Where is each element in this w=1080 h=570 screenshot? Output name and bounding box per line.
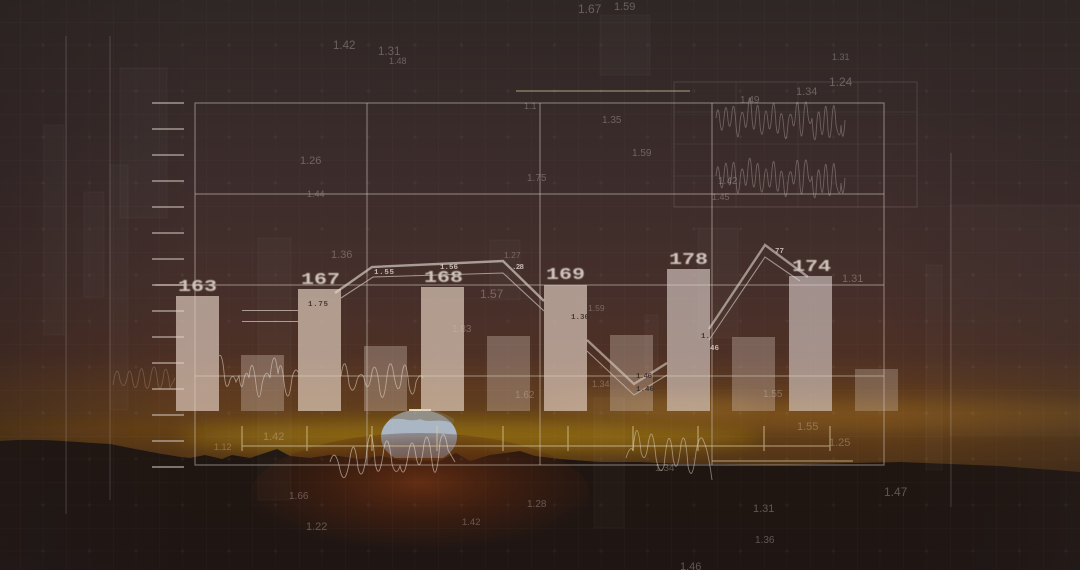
background numbers: 1.34 — [592, 379, 610, 389]
bar value labels: 163 — [178, 278, 217, 297]
bar value labels: 168 — [424, 269, 463, 288]
background numbers: 1.42 — [263, 431, 284, 443]
faint left waveform — [113, 367, 175, 388]
bar value labels: 178 — [669, 251, 708, 270]
chart frame — [155, 103, 884, 465]
bar value labels — [178, 251, 831, 297]
background numbers: 1.34 — [655, 463, 675, 474]
lower waveform — [330, 435, 455, 478]
background numbers: 1.27 — [504, 250, 521, 260]
bars — [176, 269, 898, 411]
background numbers: 1.42 — [718, 176, 738, 187]
background numbers: 1.47 — [884, 485, 908, 499]
series point labels: 1.46 — [636, 373, 652, 381]
series point labels: 1.46 — [636, 386, 654, 394]
line series — [335, 245, 808, 395]
series point labels: 77 — [775, 248, 784, 256]
series point labels: 1.55 — [374, 269, 394, 277]
ground glow — [250, 433, 590, 557]
background numbers: 1.42 — [333, 40, 355, 52]
background numbers: 1.83 — [452, 324, 472, 335]
bar value labels: 174 — [792, 258, 831, 277]
background numbers: 1.36 — [755, 535, 775, 546]
short legend lines — [242, 310, 298, 322]
background numbers: 1.59 — [632, 148, 652, 159]
series point labels: .28 — [512, 264, 524, 272]
upper waveforms — [716, 98, 845, 198]
background numbers: 1.25 — [829, 437, 850, 449]
horizon silhouette — [0, 440, 1080, 570]
background numbers: 1.44 — [307, 189, 325, 199]
center waveform — [113, 355, 423, 397]
series point labels: 1.56 — [440, 264, 458, 272]
background numbers: 1.31 — [832, 52, 850, 62]
background numbers — [214, 1, 908, 570]
series point labels: 46 — [710, 345, 720, 353]
series point labels: 1. — [701, 333, 710, 341]
background numbers: 1.1 — [524, 101, 537, 111]
background numbers: 1.48 — [389, 56, 407, 66]
y axis ticks — [152, 103, 184, 467]
background numbers: 1.22 — [306, 521, 327, 533]
background numbers: 1.57 — [480, 287, 504, 301]
background numbers: 1.55 — [763, 389, 783, 400]
thick trend line — [335, 261, 544, 301]
background numbers: 1.28 — [527, 499, 547, 510]
background numbers: 1.36 — [331, 249, 352, 261]
background numbers: 1.31 — [378, 46, 400, 58]
series point labels: 1.36 — [571, 314, 589, 322]
background numbers: 1.59 — [614, 1, 635, 13]
background numbers: 1.62 — [515, 390, 535, 401]
series point labels — [308, 248, 784, 394]
background numbers: 1.59 — [588, 303, 605, 313]
series point labels: 1.75 — [308, 301, 328, 309]
background numbers: 1.66 — [289, 491, 309, 502]
background numbers: 1.31 — [842, 273, 863, 285]
background numbers: 1.12 — [214, 442, 232, 452]
background numbers: 1.31 — [753, 503, 774, 515]
background numbers: 1.24 — [829, 75, 853, 89]
thin trend line — [341, 273, 544, 311]
sun — [381, 409, 457, 458]
upper right panel — [674, 82, 917, 207]
bar value labels: 167 — [301, 271, 340, 290]
background numbers: 1.75 — [527, 173, 547, 184]
right lower waveform — [626, 430, 712, 480]
background numbers: 1.49 — [740, 95, 760, 106]
background numbers: 1.34 — [796, 86, 817, 98]
background numbers: 1.42 — [462, 517, 480, 528]
background numbers: 1.55 — [797, 421, 818, 433]
background numbers: 1.35 — [602, 115, 622, 126]
background numbers: 1.26 — [300, 155, 321, 167]
x axis scale — [242, 91, 853, 461]
bar value labels: 169 — [546, 266, 585, 285]
background numbers: 1.45 — [712, 192, 730, 202]
background numbers: 1.67 — [578, 2, 602, 16]
